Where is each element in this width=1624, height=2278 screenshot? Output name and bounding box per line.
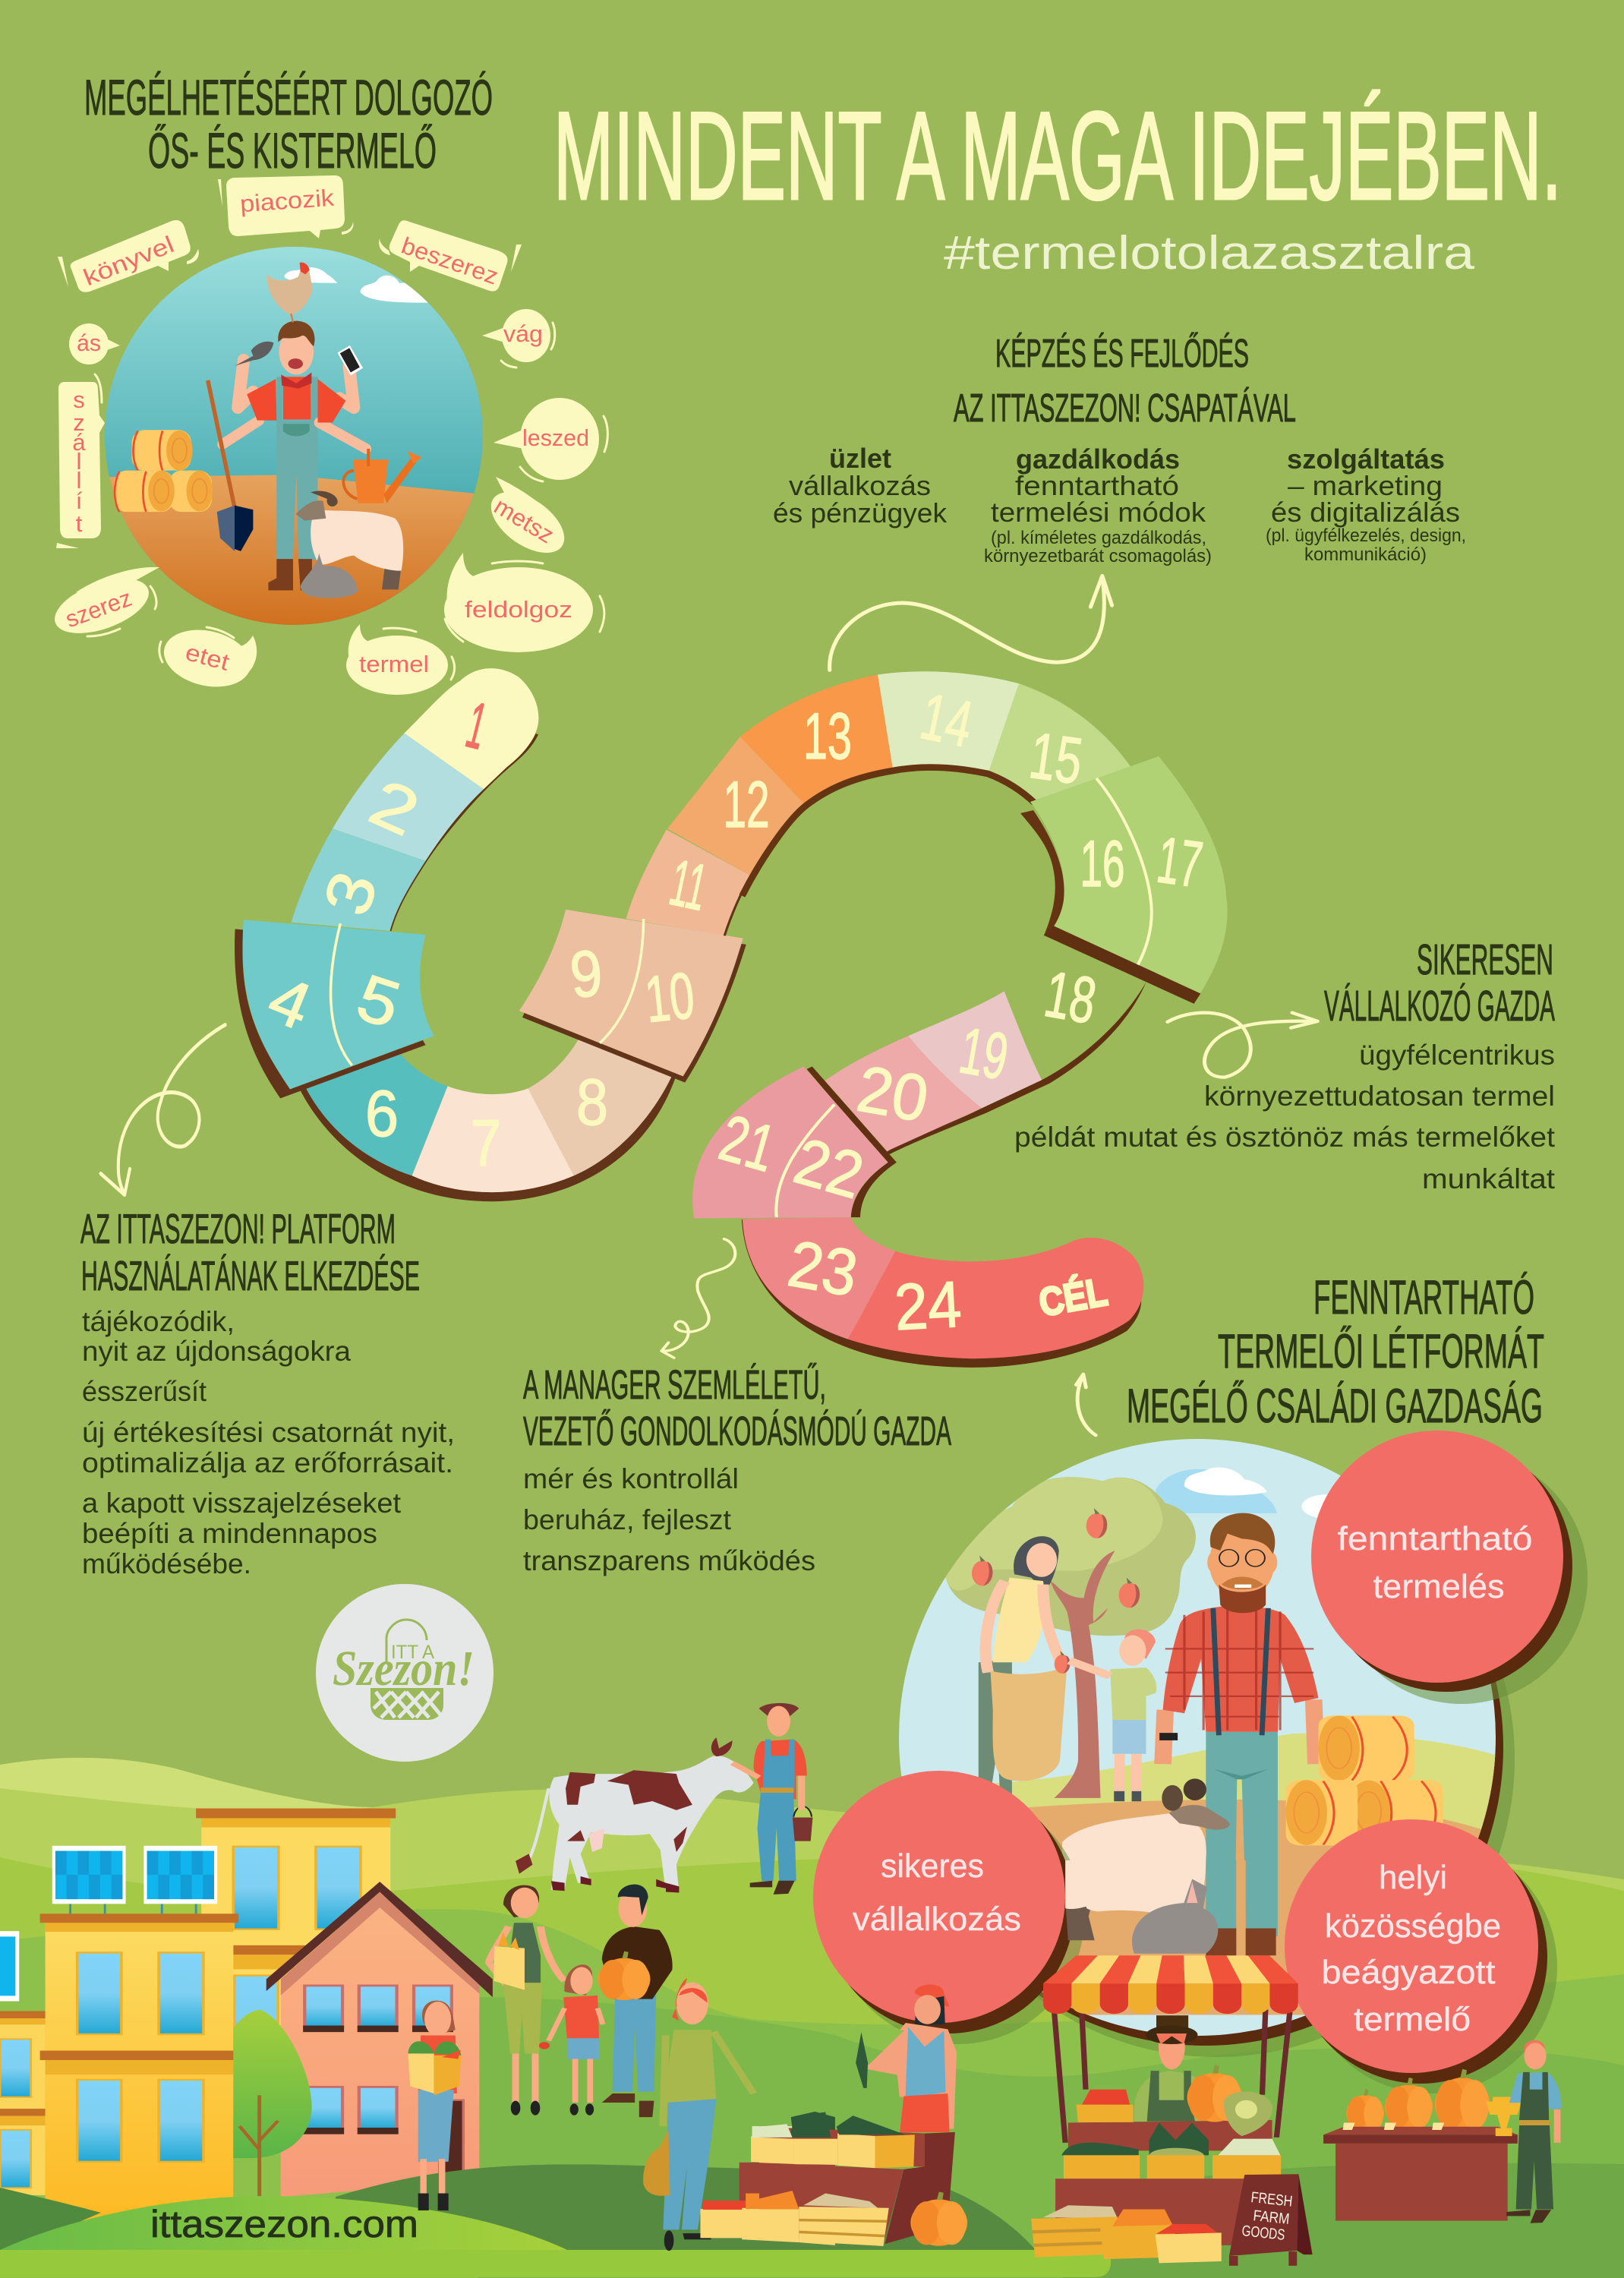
speech bubble: vág: vág xyxy=(503,320,543,347)
heading: subsistence farmer xyxy=(84,69,493,178)
woman with shopping bags xyxy=(408,2001,461,2210)
hay bales xyxy=(1286,1715,1443,1845)
speech bubble: piacozik: piacozik xyxy=(239,185,336,217)
square 7 xyxy=(412,1086,574,1192)
sign text: GOODS xyxy=(1241,2223,1285,2244)
hay bales xyxy=(114,430,213,512)
main yellow building xyxy=(40,1914,238,2220)
speech bubble: metsz xyxy=(481,477,575,565)
callout: sustainable production: fenntartható xyxy=(1338,1520,1532,1557)
squares 16-17 xyxy=(1030,756,1228,993)
hill xyxy=(994,1733,1496,1838)
speech bubble: etet xyxy=(158,622,257,695)
text column: business: és pénzügyek xyxy=(773,497,948,528)
callout: successful business xyxy=(813,1771,1084,2044)
callout: community producer: helyi xyxy=(1379,1859,1447,1896)
board game snake xyxy=(235,668,1228,1368)
logo: Itt a Szezon: ITT A xyxy=(391,1642,434,1663)
speech bubble: szállít: í xyxy=(76,487,83,514)
shadow squares 4-5 xyxy=(235,929,425,1098)
head xyxy=(279,330,314,374)
square numbers: 8 xyxy=(576,1066,608,1139)
speech bubble: ás xyxy=(69,323,120,364)
text block: platform start xyxy=(80,1205,455,1579)
speech bubble: szállít: l xyxy=(77,448,81,475)
text column: services: szolgáltatás xyxy=(1287,443,1445,475)
stall two awning xyxy=(1043,1955,1298,2014)
panel: family farm scene xyxy=(873,1439,1515,2057)
stall one table xyxy=(759,2127,955,2244)
text block: platform start: nyit az újdonságokra xyxy=(82,1336,351,1367)
text column: services: kommunikáció) xyxy=(1304,544,1427,565)
speech bubble: szállít xyxy=(56,374,105,548)
market drawing xyxy=(759,1860,1562,2266)
callout: community producer: közösségbe xyxy=(1325,1907,1501,1945)
legs of big farmer and rabbit xyxy=(1065,1860,1276,1955)
text block: successful entrepreneur: példát mutat és ösztönöz más termelőket xyxy=(1014,1122,1556,1153)
speech bubble: szállít: t xyxy=(76,510,83,537)
heading: training xyxy=(954,332,1296,431)
square numbers: 14 xyxy=(915,680,979,762)
callout: sustainable production xyxy=(1311,1431,1588,1704)
family woman xyxy=(489,1885,565,2116)
hashtag: #termelotolazasztalra xyxy=(944,227,1475,279)
text block: manager xyxy=(523,1362,951,1576)
stall one woman xyxy=(856,1985,952,2132)
square numbers: 4 xyxy=(258,962,321,1044)
square numbers: CÉL xyxy=(1036,1270,1111,1325)
speech bubble: etet: etet xyxy=(183,639,232,676)
panel: market stalls xyxy=(700,1860,1562,2266)
square numbers: 5 xyxy=(348,961,408,1043)
square numbers: 7 xyxy=(471,1107,501,1180)
speech bubble: leszed: leszed xyxy=(522,424,589,451)
callout: sustainable production: termelés xyxy=(1373,1568,1505,1605)
far yellow building xyxy=(196,1809,396,2118)
text block: manager: beruház, fejleszt xyxy=(523,1504,732,1535)
speech bubble: beszerez xyxy=(379,220,522,292)
stall two poles xyxy=(1055,2009,1290,2143)
chicken xyxy=(267,263,313,322)
text block: platform start: a kapott visszajelzéseket xyxy=(82,1488,402,1519)
text column: services: – marketing xyxy=(1288,470,1443,501)
square 2 xyxy=(333,734,484,861)
stall two vendor xyxy=(1134,2015,1206,2122)
arrow: square 13 to training xyxy=(830,576,1112,670)
speech bubble: könyvel: könyvel xyxy=(80,231,178,291)
square numbers: 3 xyxy=(310,863,392,923)
square 11 xyxy=(626,830,751,935)
trophy xyxy=(1486,2097,1522,2136)
square numbers: 9 xyxy=(567,936,605,1012)
square 6 xyxy=(305,1054,448,1175)
text block: platform start: beépíti a mindennapos xyxy=(82,1518,377,1549)
square numbers: 23 xyxy=(783,1227,862,1311)
clipped ground and clouds xyxy=(99,267,486,632)
text block: successful entrepreneur xyxy=(1014,935,1556,1194)
square numbers: 1 xyxy=(459,689,494,763)
text block: successful entrepreneur: ügyfélcentrikus xyxy=(1359,1040,1555,1071)
overalls legs xyxy=(276,377,318,560)
logo: Itt a Szezon xyxy=(316,1584,494,1762)
pink house xyxy=(266,1882,493,2197)
ram xyxy=(295,491,403,589)
text column: farming: gazdálkodás xyxy=(1016,443,1180,475)
logo: Itt a Szezon: Szezon! xyxy=(333,1641,475,1696)
text column: farming: fenntartható xyxy=(1015,470,1179,501)
text column: business xyxy=(773,443,948,528)
scene disc xyxy=(899,1439,1496,2036)
heading: family farm xyxy=(1127,1271,1544,1433)
tree foliage xyxy=(944,1477,1196,1636)
watering can xyxy=(343,449,422,503)
square numbers: 6 xyxy=(365,1077,399,1150)
text column: farming: termelési módok xyxy=(991,497,1206,528)
text block: manager: transzparens működés xyxy=(523,1545,815,1576)
square numbers: 21 xyxy=(712,1101,784,1186)
speech bubble: szállít: z xyxy=(73,409,85,436)
square numbers: 15 xyxy=(1026,719,1086,798)
text block: successful entrepreneur: munkáltat xyxy=(1422,1163,1556,1194)
segment group upper left xyxy=(235,668,820,1201)
square 1 xyxy=(404,668,538,789)
text column: farming: környezetbarát csomagolás) xyxy=(984,546,1212,566)
callout: community producer xyxy=(1285,1819,1557,2093)
sky disc xyxy=(105,247,483,625)
speech bubble: leszed xyxy=(494,398,607,481)
text column: services xyxy=(1266,443,1466,565)
ram xyxy=(1061,1778,1230,1917)
sign text: FARM xyxy=(1252,2207,1291,2228)
square numbers xyxy=(258,680,1206,1344)
speech bubble: termel: termel xyxy=(359,651,429,677)
shadow squares 9-10 xyxy=(522,944,746,1083)
speech bubble: feldolgoz: feldolgoz xyxy=(465,596,572,623)
stall one crates xyxy=(759,2112,967,2246)
shadow under squares 6-8 xyxy=(300,1076,675,1201)
trowel xyxy=(235,342,273,366)
speech bubble: könyvel xyxy=(58,220,199,292)
square numbers: 2 xyxy=(360,765,430,850)
heading: training: KÉPZÉS ÉS FEJLŐDÉS xyxy=(995,332,1249,376)
speech bubble: metsz: metsz xyxy=(490,493,559,548)
speech bubble: vág xyxy=(482,309,555,368)
ground ridges and mound xyxy=(0,2164,1111,2277)
text column: business: vállalkozás xyxy=(789,470,931,501)
squares 12 to 15 xyxy=(667,671,1131,896)
text column: business: üzlet xyxy=(829,443,891,474)
squares 9-10 xyxy=(519,910,743,1076)
speech bubble: feldolgoz xyxy=(444,553,604,652)
heading: training: AZ ITTASZEZON! CSAPATÁVAL xyxy=(954,387,1296,431)
text block: platform start: ésszerűsít xyxy=(82,1376,207,1407)
tree xyxy=(233,2010,312,2197)
text block: platform start: HASZNÁLATÁNAK ELKEZDÉSE xyxy=(81,1252,420,1299)
square 3 xyxy=(292,828,425,931)
family child xyxy=(539,1964,603,2116)
text block: successful entrepreneur: környezettudatosan termel xyxy=(1204,1081,1555,1112)
text column: services: és digitalizálás xyxy=(1271,497,1460,528)
stall three table xyxy=(1323,2069,1518,2221)
woman in green top xyxy=(643,1979,754,2251)
callout: successful business: sikeres xyxy=(881,1847,984,1885)
ground xyxy=(1017,1800,1510,2015)
heading: subsistence farmer: ŐS- ÉS KISTERMELŐ xyxy=(148,122,437,178)
speech bubble: piacozik xyxy=(218,175,353,238)
square numbers: 22 xyxy=(787,1125,871,1213)
tree trunk xyxy=(1050,1551,1115,1798)
stall three man xyxy=(1506,2040,1562,2223)
inner edge 11-12 xyxy=(724,797,820,935)
speech bubble: szállít: s xyxy=(73,387,85,413)
square numbers: 12 xyxy=(723,768,770,841)
woman picking apples xyxy=(979,1536,1071,1794)
landscape hills xyxy=(0,1758,1624,2278)
square 8 xyxy=(528,1040,671,1175)
callout: community producer: termelő xyxy=(1354,2001,1471,2038)
square numbers: 17 xyxy=(1153,823,1206,902)
text column: farming: (pl. kíméletes gazdálkodás, xyxy=(991,528,1206,548)
arrow: to manager xyxy=(661,1239,735,1358)
arms xyxy=(238,360,354,407)
people and cow in the town xyxy=(408,1703,812,2251)
text block: platform start: optimalizálja az erőforrásait. xyxy=(82,1447,453,1478)
shovel xyxy=(208,380,235,507)
left crates drawn in town scale xyxy=(700,2112,835,2245)
square numbers: 11 xyxy=(664,846,713,925)
square numbers: 13 xyxy=(803,700,852,773)
clouds xyxy=(1156,1469,1277,1513)
left building xyxy=(0,1931,46,2195)
speech bubble: szállít: á xyxy=(72,429,86,456)
disc shadows xyxy=(918,1460,1515,2057)
speech bubble: szállít: l xyxy=(77,467,81,494)
square numbers: 20 xyxy=(852,1052,933,1136)
panel: stressed farmer circle xyxy=(99,247,486,632)
family man with pumpkin xyxy=(598,1885,673,2117)
text block: manager: mér és kontrollál xyxy=(523,1463,739,1494)
cow xyxy=(516,1737,754,1892)
speech bubble: beszerez: beszerez xyxy=(398,232,502,290)
speech bubble: ás: ás xyxy=(77,330,101,356)
square numbers: 16 xyxy=(1080,828,1125,901)
sign text xyxy=(1241,2189,1293,2244)
stall two crates and sign xyxy=(1031,2174,1313,2266)
website url: ittaszezon.com xyxy=(150,2203,418,2245)
square numbers: 18 xyxy=(1039,958,1102,1038)
apples xyxy=(1086,1508,1107,1538)
arrow: to successful farmer xyxy=(1168,1013,1317,1077)
speech bubble: termel xyxy=(346,624,455,695)
square numbers: 24 xyxy=(893,1268,963,1344)
text block: manager: A MANAGER SZEMLÉLETŰ, xyxy=(523,1362,826,1408)
text block: platform start: működésébe. xyxy=(82,1548,251,1579)
text block: platform start: tájékozódik, xyxy=(82,1306,235,1337)
sign text: FRESH xyxy=(1250,2189,1293,2210)
text column: services: (pl. ügyfélkezelés, design, xyxy=(1266,525,1466,546)
squares 4-5 xyxy=(243,920,434,1089)
buildings and town xyxy=(0,1809,493,2220)
boy xyxy=(1070,1630,1156,1801)
callout: successful business: vállalkozás xyxy=(853,1901,1021,1938)
stall two table xyxy=(1055,2065,1281,2245)
text block: manager: VEZETŐ GONDOLKODÁSMÓDÚ GAZDA xyxy=(523,1409,951,1454)
snake shadow upper left xyxy=(390,734,537,931)
rabbit xyxy=(301,554,358,598)
text block: platform start: AZ ITTASZEZON! PLATFORM xyxy=(80,1205,396,1252)
boots xyxy=(268,559,312,591)
speech bubble: szerez xyxy=(48,567,159,644)
arrow: to platform xyxy=(101,1025,225,1195)
text block: platform start: új értékesítési csatornát nyit, xyxy=(82,1417,455,1448)
square numbers: 19 xyxy=(954,1014,1014,1094)
callout: community producer: beágyazott xyxy=(1321,1954,1496,1991)
text column: farming xyxy=(984,443,1212,566)
solar panels xyxy=(52,1846,217,1914)
big farmer man xyxy=(1159,1513,1319,1936)
speech bubble: szerez: szerez xyxy=(62,585,135,633)
arrow: to family farm xyxy=(1076,1374,1096,1435)
farmer with bucket xyxy=(733,1703,812,1895)
square numbers: 10 xyxy=(642,959,698,1036)
heading: subsistence farmer: MEGÉLHETÉSÉÉRT DOLGOZÓ xyxy=(84,69,493,125)
squares 18 to 24 xyxy=(692,926,1200,1368)
farmer illustration xyxy=(114,263,422,598)
phone xyxy=(338,345,363,376)
shirt xyxy=(247,379,345,423)
